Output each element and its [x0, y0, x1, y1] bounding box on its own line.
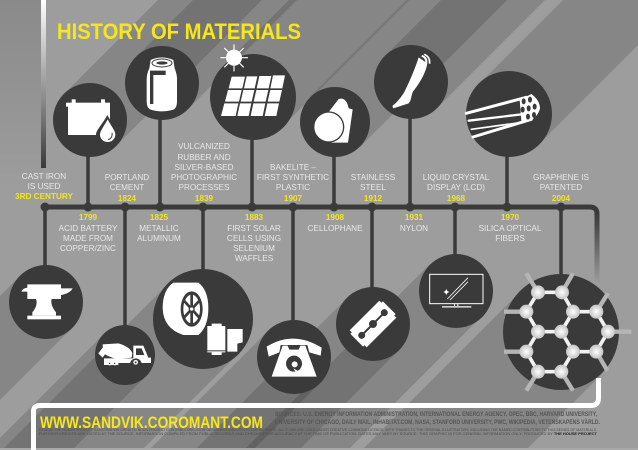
label: portland cement: 1824 [118, 194, 137, 203]
label: graphene: 2004 [552, 194, 571, 203]
credits fine print: FURTHER CREDITS ARE LISTED AT THE SOURCE. INFORMATION COMPILED FROM PUBLIC RECORDS AND CHECKED FOR ACCURACY AT THE TIME OF PUBLICATION. DATES MAY VARY BY SOURCE. THIS GRAPHIC IS FOR GENERAL INFORMATION ONLY. PRODUCED BY THE HOUSE PROJECT [39, 432, 588, 436]
label: metallic aluminum: ALUMINUM [137, 234, 181, 243]
icon: graphene [503, 273, 631, 391]
label: graphene: PATENTED [540, 183, 582, 192]
footer frame [34, 378, 598, 450]
label: metallic aluminum: 1825 [150, 213, 169, 222]
icon: bakelite roll [300, 87, 370, 157]
label: lcd: 1968 [447, 194, 466, 203]
label: solar cells: SELENIUM [233, 244, 275, 253]
label: nylon: NYLON [400, 224, 428, 233]
icon: razor blade [336, 287, 410, 361]
label: solar cells: WAFFLES [235, 254, 274, 263]
icon: can [125, 46, 199, 120]
label: acid battery: 1799 [79, 213, 98, 222]
icon: anvil [9, 265, 83, 339]
label: acid battery: MADE FROM [63, 234, 113, 243]
label: solar cells: CELLS USING [227, 234, 281, 243]
label: cellophane: 1908 [326, 213, 345, 222]
label: vulcanized rubber: PROCESSES [179, 183, 230, 192]
website url: WWW.SANDVIK.COROMANT.COM [40, 413, 263, 432]
icon: optical fibers [466, 71, 552, 157]
vertical start line [41, 0, 46, 168]
label: bakelite: BAKELITE – [270, 163, 316, 172]
label: silica optical fibers: 1970 [501, 213, 520, 222]
timeline [40, 115, 600, 330]
title: HISTORY OF MATERIALS [57, 19, 301, 44]
label: portland cement: CEMENT [110, 183, 144, 192]
label: lcd: DISPLAY (LCD) [427, 183, 485, 192]
icon: tire and film [153, 269, 253, 369]
icon: lcd monitor [419, 254, 493, 328]
label: solar cells: 1883 [245, 213, 264, 222]
label: solar cells: FIRST SOLAR [227, 224, 281, 233]
label: vulcanized rubber: SILVER-BASED [174, 163, 234, 172]
label: lcd: LIQUID CRYSTAL [423, 173, 490, 182]
icon: solar panel and sun [210, 44, 296, 140]
label: nylon: 1931 [405, 213, 424, 222]
label: stainless steel: 1912 [364, 194, 383, 203]
icon: battery [53, 83, 127, 157]
label: cellophane: CELLOPHANE [307, 224, 363, 233]
label: bakelite: 1907 [284, 194, 303, 203]
label: vulcanized rubber: RUBBER AND [177, 153, 231, 162]
label: acid battery: COPPER/ZINC [60, 244, 116, 253]
label: graphene: GRAPHENE IS [533, 173, 590, 182]
label: portland cement: PORTLAND [105, 173, 149, 182]
credits fine print: DESIGN: THE HOUSE PROJECT. ILLUSTRATION CREDITS: NOUN PROJECT CONTRIBUTORS, ICON DESIGNERS AND COLLECTIVE AUTHORS. ALL ICONS ARE USED UNDER CREATIVE COMMONS LICENCE. WITH THANKS TO THE ORIGINAL ILLUSTRATORS, INCLUDING THE NAMED CONTRIBUTORS TO THIS SERIES OF MATERIALS. [39, 428, 597, 432]
label: silica optical fibers: SILICA OPTICAL [479, 224, 542, 233]
label: metallic aluminum: METALLIC [139, 224, 179, 233]
icon: cement truck [95, 325, 155, 385]
label: cast iron: 3RD CENTURY [15, 192, 73, 201]
label: vulcanized rubber: PHOTOGRAPHIC [171, 173, 237, 182]
label: vulcanized rubber: VULCANIZED [178, 142, 230, 151]
label: bakelite: FIRST SYNTHETIC [257, 173, 329, 182]
label: silica optical fibers: FIBERS [495, 234, 525, 243]
icon: stocking [374, 45, 448, 119]
label: stainless steel: STAINLESS [351, 173, 396, 182]
label: vulcanized rubber: 1839 [195, 194, 214, 203]
label: cast iron: IS USED [28, 182, 60, 191]
label: acid battery: ACID BATTERY [59, 224, 118, 233]
label: bakelite: PLASTIC [276, 183, 310, 192]
icon: telephone [257, 320, 331, 394]
label: cast iron: CAST IRON [22, 172, 66, 181]
label: stainless steel: STEEL [360, 183, 386, 192]
